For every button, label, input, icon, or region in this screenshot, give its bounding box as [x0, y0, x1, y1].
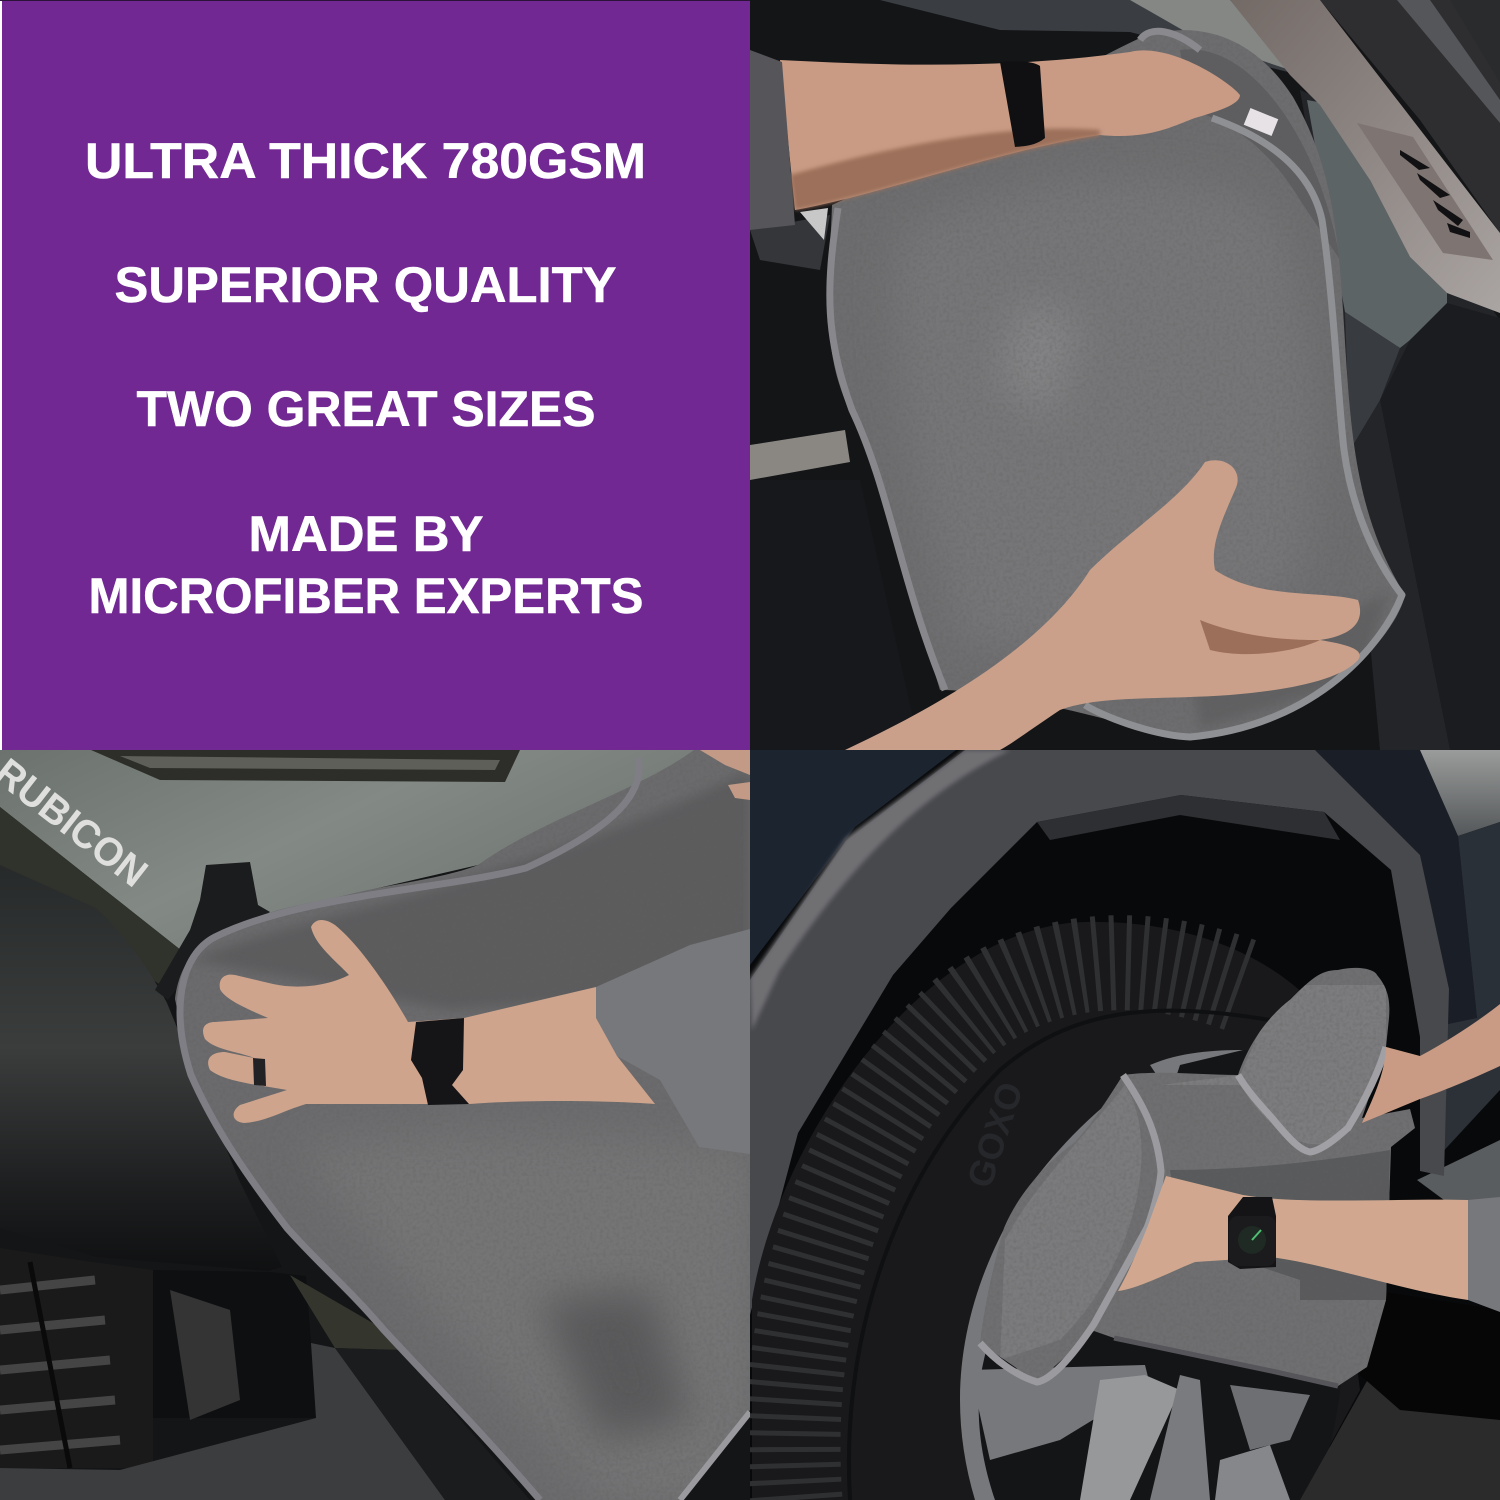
towel tag: [1244, 108, 1278, 136]
tire: [752, 922, 1360, 1500]
text: ultra thick 780gsm: ULTRA THICK 780GSM: [85, 133, 646, 189]
arm and hand: lower: [845, 460, 1360, 750]
seat and console: [750, 430, 850, 480]
towel: crumpled grey microfiber: [980, 960, 1420, 1390]
fender flare: [0, 865, 245, 1196]
icon: smartwatch on tire arm: [1228, 1197, 1276, 1269]
vehicle hood: [0, 750, 700, 951]
dashboard: [1300, 90, 1500, 750]
vehicle body: [750, 750, 956, 965]
tire: [0, 1262, 120, 1468]
dark clothing behind towel: [1367, 1372, 1500, 1420]
ground: [1300, 1372, 1500, 1500]
icon: smartwatch band upper: [1000, 61, 1045, 147]
icon: smartwatch on hood arm: [411, 1018, 469, 1105]
shirt sleeve: [596, 929, 750, 1154]
wheel arch flare: [750, 750, 1449, 1315]
a-pillar trim and air vent: [1230, 0, 1500, 313]
text: made by microfiber experts: MICROFIBER EXPERTS: [88, 568, 644, 624]
text: made by microfiber experts: [88, 506, 644, 624]
panel: photo of towel on tire: [750, 750, 1500, 1500]
text: superior quality: SUPERIOR QUALITY: [114, 257, 616, 313]
panel: purple feature list: [0, 0, 750, 750]
panel: photo of towel wiping car dashboard: [750, 0, 1500, 750]
alloy wheel: [960, 1050, 1345, 1500]
text: two great sizes: TWO GREAT SIZES: [136, 381, 596, 437]
text: made by microfiber experts: MADE BY: [248, 506, 484, 562]
bumper: [0, 1343, 445, 1500]
towel: grey microfiber: [820, 20, 1410, 740]
hand and forearm upper: [1362, 1004, 1500, 1123]
wheel well and suspension: [153, 1270, 316, 1418]
text: tire sidewall: GOXO: [959, 1077, 1031, 1192]
mirror bracket: [155, 862, 270, 1000]
hand and arm on hood: [203, 920, 655, 1123]
second hand at towel top: [700, 750, 750, 800]
windshield view: [880, 0, 1300, 75]
towel: grey microfiber: [175, 750, 750, 1500]
panel: photo of towel on jeep hood: [0, 750, 750, 1500]
hand and forearm lower: [1118, 1176, 1500, 1312]
arm and hand: upper: [750, 50, 1240, 230]
